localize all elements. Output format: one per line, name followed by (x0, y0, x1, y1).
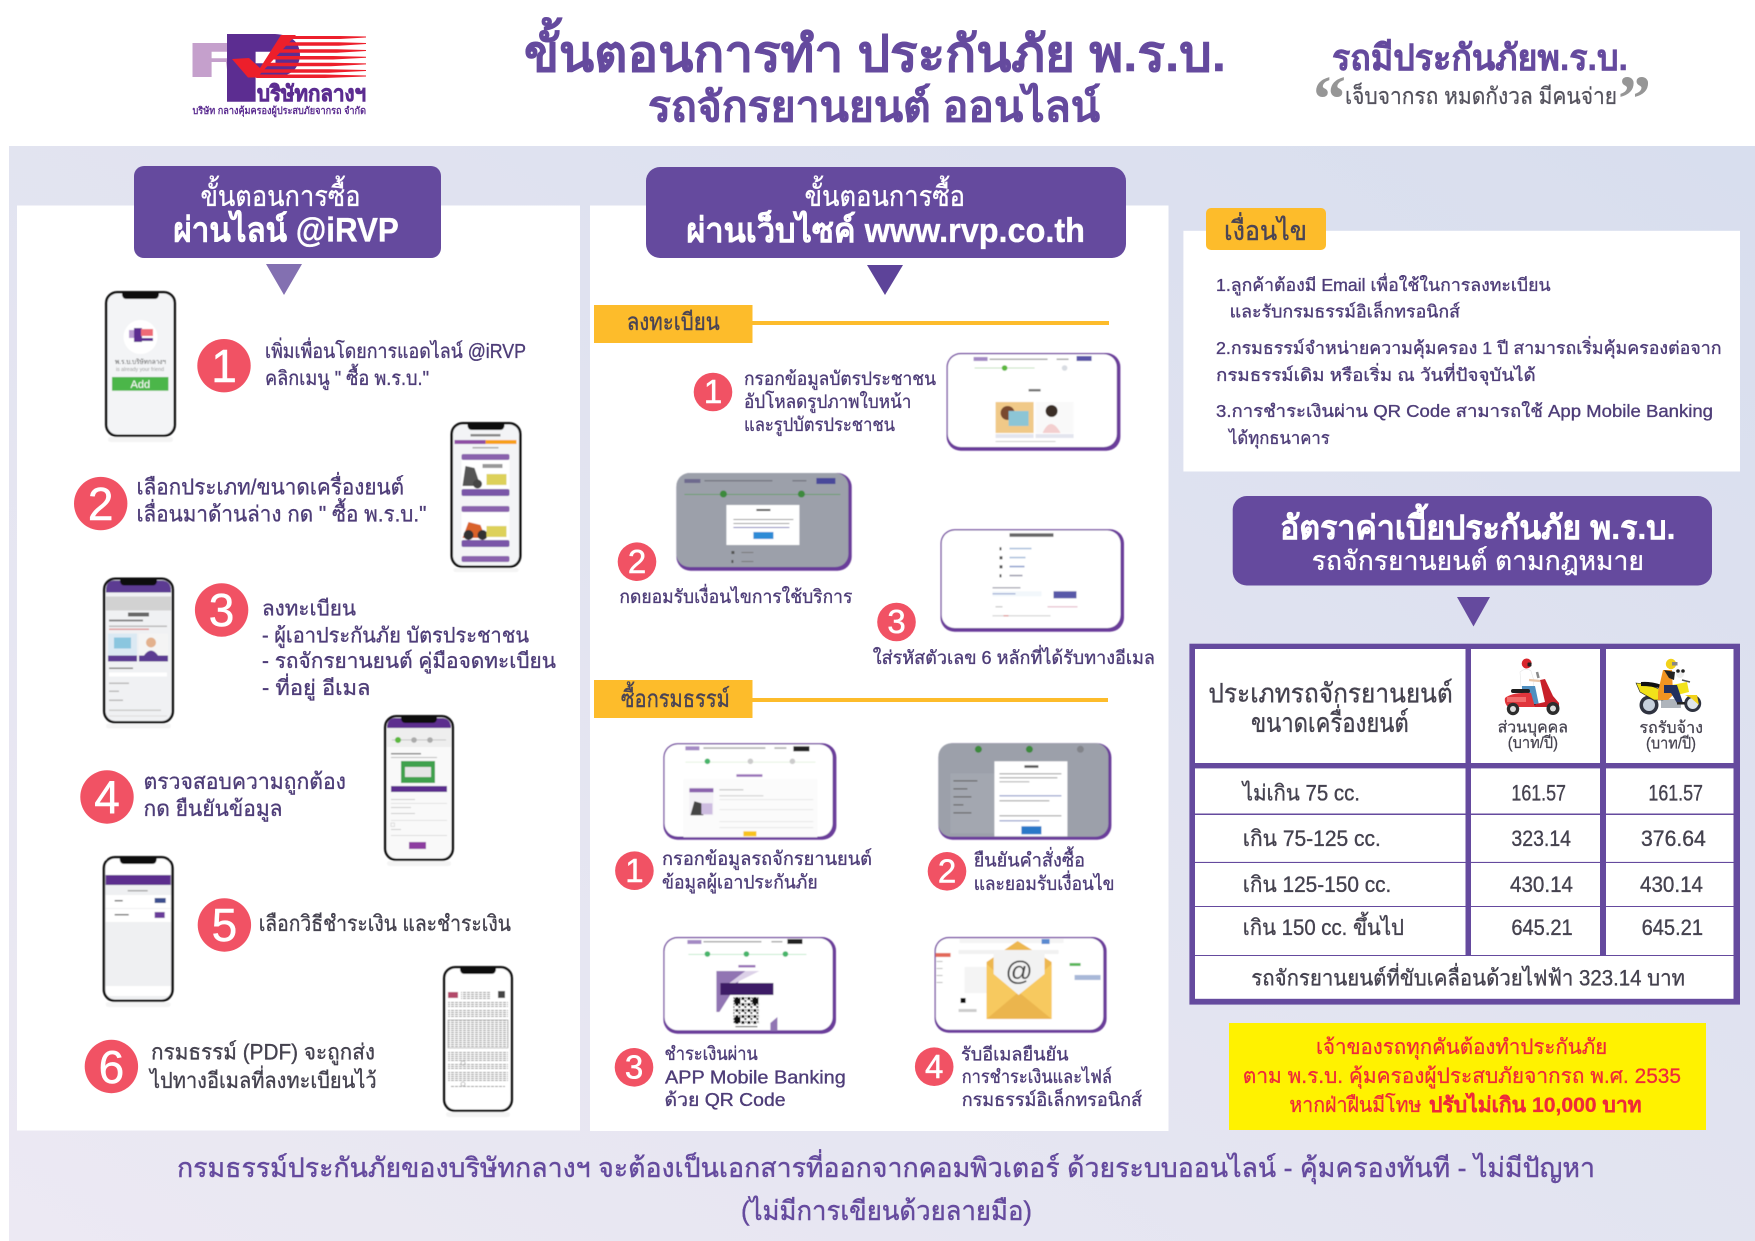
register step 2 badge: 2 (628, 543, 646, 580)
row: 75-125 cc: 323.14 (1511, 826, 1571, 851)
footer note: (ไม่มีการเขียนด้วยลายมือ) (741, 1196, 1032, 1226)
buy step 3 badge: 3 (625, 1048, 643, 1086)
step 4 text: ตรวจสอบความถูกต้อง (144, 769, 346, 795)
heading: via website: ขั้นตอนการซื้อ (805, 175, 965, 213)
table column heading: type (1208, 678, 1453, 738)
step 2 text: เลื่อนมาด้านล่าง กด " ซื้อ พ.ร.บ." (136, 498, 426, 526)
step 4 badge (80, 770, 134, 824)
row: over 150 cc (1243, 912, 1703, 940)
arrow: via website (867, 265, 903, 295)
row: up to 75 cc (1241, 780, 1703, 805)
step 2 text: เลือกประเภท/ขนาดเครื่องยนต์ (136, 472, 404, 500)
logo: RVP (192, 34, 366, 118)
title: รถจักรยานยนต์ ออนไลน์ (648, 82, 1100, 130)
phone 1: add LINE friend: Add (131, 379, 150, 391)
step 3 text: - ที่อยู่ อีเมล (262, 673, 370, 701)
row: 75-125 cc: 376.64 (1641, 826, 1706, 851)
step 5 badge: 5 (212, 899, 237, 951)
buy step 3 badge (615, 1048, 653, 1087)
step 1 badge: 1 (211, 340, 237, 392)
step 6 text (148, 1040, 377, 1093)
tagline: ” (1618, 63, 1651, 136)
register step 3 text: ใส่รหัสตัวเลข 6 หลักที่ได้รับทางอีเมล (873, 645, 1155, 668)
screenshot: email confirmation (935, 937, 1107, 1033)
table column heading: type: ประเภทรถจักรยานยนต์ (1208, 678, 1453, 709)
title (524, 17, 1226, 130)
conditions heading tab (1206, 208, 1326, 250)
footer note (177, 1149, 1595, 1226)
footer note: กรมธรรม์ประกันภัยของบริษัทกลางฯ จะต้องเป็นเอกสารที่ออกจากคอมพิวเตอร์ ด้วยระบบออนไลน์ - คุ้มครองทันที - ไม่มีปัญหา (177, 1149, 1595, 1185)
step 2 badge (74, 477, 127, 530)
buy step 4 badge (915, 1047, 954, 1086)
buy step 4 text: รับอีเมลยืนยัน (961, 1044, 1069, 1065)
screenshot: OTP verify (940, 529, 1124, 632)
buy step 2 text: และยอมรับเงื่อนไข (974, 870, 1114, 895)
conditions list: 1.ลูกค้าต้องมี Email เพื่อใช้ในการลงทะเบียน (1216, 273, 1551, 296)
row: over 150 cc: 645.21 (1642, 915, 1703, 940)
title: ขั้นตอนการทำ ประกันภัย พ.ร.บ. (524, 17, 1226, 82)
heading: premium rates (1233, 496, 1712, 586)
label: personal use: (บาท/ปี) (1508, 734, 1558, 752)
conditions list (1216, 273, 1722, 449)
row: 75-125 cc (1243, 826, 1706, 851)
label: personal use (1498, 720, 1568, 752)
step 4 badge: 4 (94, 771, 120, 823)
step 4 text (144, 769, 346, 822)
label: for hire: รถรับจ้าง (1639, 719, 1703, 737)
buy step 4 text (961, 1044, 1142, 1110)
conditions list: และรับกรมธรรม์อิเล็กทรอนิกส์ (1230, 301, 1460, 322)
panel: buy via website (590, 206, 1168, 1131)
heading: via website (646, 167, 1126, 258)
buy step 1 text: กรอกข้อมูลรถจักรยานยนต์ (662, 848, 872, 870)
label: for hire: (บาท/ปี) (1646, 734, 1696, 752)
callout: legal warning: หากฝ่าฝืนมีโทษ (1289, 1093, 1421, 1117)
register step 1 badge: 1 (704, 373, 722, 410)
phone 1: add LINE friend: is already your friend (116, 367, 164, 373)
buy step 1 badge: 1 (625, 852, 644, 889)
screenshot: email confirmation: @ (1005, 956, 1033, 986)
buy step 2 text (974, 847, 1114, 895)
row: 75-125 cc: เกิน 75-125 cc. (1243, 826, 1381, 851)
row: up to 75 cc: 161.57 (1511, 780, 1566, 805)
section tab: register: ลงทะเบียน (627, 309, 720, 336)
buy step 1 text: ข้อมูลผู้เอาประกันภัย (662, 872, 818, 893)
screenshot: confirm order (938, 743, 1111, 840)
icon: motorcycle taxi rider (1636, 659, 1701, 714)
row: over 150 cc: เกิน 150 cc. ขึ้นไป (1243, 912, 1404, 940)
row: 125-150 cc: เกิน 125-150 cc. (1243, 872, 1391, 897)
arrow: premium rates (1457, 597, 1490, 626)
row: up to 75 cc: ไม่เกิน 75 cc. (1241, 780, 1360, 805)
buy step 1 badge (615, 851, 654, 890)
phone 6: PDF policy (444, 967, 512, 1117)
tagline (1313, 37, 1651, 136)
register step 1 text: และรูปบัตรประชาชน (744, 415, 895, 436)
buy step 2 badge (928, 852, 966, 891)
register step 1 text (744, 369, 936, 436)
step 3 badge (195, 583, 248, 637)
row: 125-150 cc (1243, 872, 1703, 897)
heading: via LINE (134, 166, 441, 258)
step 2 text (136, 472, 426, 526)
icon: scooter rider (1505, 658, 1560, 715)
conditions list: 3.การชำระเงินผ่าน QR Code สามารถใช้ App Mobile Banking (1216, 401, 1713, 421)
logo: RVP: บริษัท กลางคุ้มครองผู้ประสบภัยจากรถ จำกัด (192, 105, 366, 118)
buy step 4 badge: 4 (925, 1048, 943, 1085)
callout: legal warning: ปรับไม่เกิน 10,000 บาท (1429, 1092, 1642, 1117)
step 3 text: - ผู้เอาประกันภัย บัตรประชาชน (262, 624, 529, 648)
heading: premium rates: อัตราค่าเบี้ยประกันภัย พ.ร.บ. (1280, 503, 1676, 546)
row: up to 75 cc: 161.57 (1648, 780, 1703, 805)
conditions list: 2.กรมธรรม์จำหน่ายความคุ้มครอง 1 ปี สามารถเริ่มคุ้มครองต่อจาก (1216, 336, 1722, 359)
screenshot: accept terms (676, 473, 852, 571)
register step 2 text: กดยอมรับเงื่อนไขการใช้บริการ (619, 584, 852, 607)
conditions heading tab: เงื่อนไข (1224, 212, 1307, 246)
callout: legal warning: เจ้าของรถทุกคันต้องทำประกันภัย (1316, 1036, 1607, 1060)
buy step 3 text (664, 1043, 846, 1110)
section tab: register (594, 305, 1109, 343)
step 3 text: - รถจักรยานยนต์ คู่มือจดทะเบียน (262, 649, 556, 674)
conditions list: กรมธรรม์เดิม หรือเริ่ม ณ วันที่ปัจจุบันได้ (1216, 363, 1536, 386)
step 3 text (262, 598, 556, 701)
register step 1 badge (694, 373, 732, 411)
step 3 text: ลงทะเบียน (262, 598, 356, 620)
table column heading: type: ขนาดเครื่องยนต์ (1251, 704, 1409, 738)
step 5 text: เลือกวิธีชำระเงิน และชำระเงิน (259, 911, 511, 936)
panel: conditions (1183, 208, 1740, 472)
row: 125-150 cc: 430.14 (1510, 872, 1573, 897)
buy step 3 text: APP Mobile Banking (665, 1066, 846, 1087)
label: personal use: ส่วนบุคคล (1498, 720, 1568, 738)
phone 1: add LINE friend: พ.ร.บ.บริษัทกลางฯ (115, 358, 166, 366)
tagline: “ (1313, 63, 1346, 136)
label: for hire (1639, 719, 1703, 752)
step 3 badge: 3 (209, 584, 234, 636)
row: 125-150 cc: 430.14 (1640, 872, 1703, 897)
step 1 text: เพิ่มเพื่อนโดยการแอดไลน์ @iRVP (265, 337, 526, 363)
step 1 badge (197, 339, 251, 392)
heading: via LINE: ผ่านไลน์ @iRVP (173, 210, 399, 250)
register step 1 text: กรอกข้อมูลบัตรประชาชน (744, 369, 936, 390)
buy step 2 text: ยืนยันคำสั่งซื้อ (974, 847, 1085, 872)
panel: buy via LINE (17, 206, 580, 1130)
tagline: เจ็บจากรถ หมดกังวล มีคนจ่าย (1345, 81, 1617, 109)
screenshot: upload photos (947, 353, 1120, 451)
step 5 badge (198, 898, 251, 952)
callout: legal warning: ตาม พ.ร.บ. คุ้มครองผู้ประสบภัยจากรถ พ.ศ. 2535 (1243, 1065, 1681, 1089)
logo: RVP: บริษัทกลางฯ (257, 81, 366, 106)
row: over 150 cc: 645.21 (1511, 915, 1573, 940)
phone 1: add LINE friend (106, 292, 175, 442)
buy step 1 text (662, 848, 872, 893)
buy step 4 text: การชำระเงินและไฟล์ (962, 1066, 1112, 1087)
screenshot: vehicle form (663, 743, 836, 840)
step 1 text: คลิกเมนู " ซื้อ พ.ร.บ." (265, 364, 429, 391)
phone 4: verify data (385, 716, 453, 866)
premium table (1189, 644, 1740, 1005)
register step 3 badge: 3 (887, 603, 906, 640)
register step 2 badge (618, 542, 656, 581)
heading: via website: ผ่านเว็บไซค์ www.rvp.co.th (686, 209, 1085, 250)
phone 3: register (104, 578, 173, 728)
heading: premium rates: รถจักรยานยนต์ ตามกฎหมาย (1312, 545, 1644, 576)
section tab: buy policy (594, 680, 1108, 718)
step 6 badge (85, 1040, 138, 1093)
step 6 text: กรมธรรม์ (PDF) จะถูกส่ง (151, 1040, 375, 1066)
section tab: buy policy: ซื้อกรมธรรม์ (621, 681, 730, 713)
step 2 badge: 2 (88, 478, 113, 530)
buy step 2 badge: 2 (938, 852, 956, 890)
buy step 3 text: ชำระเงินผ่าน (664, 1043, 758, 1064)
phone 5: choose payment (104, 857, 172, 1007)
step 6 badge: 6 (99, 1041, 124, 1093)
arrow: via LINE (266, 264, 302, 295)
tagline: รถมีประกันภัยพ.ร.บ. (1332, 37, 1628, 78)
step 4 text: กด ยืนยันข้อมูล (144, 796, 282, 822)
step 6 text: ไปทางอีเมลที่ลงทะเบียนไว้ (148, 1065, 377, 1093)
buy step 4 text: กรมธรรม์อิเล็กทรอนิกส์ (962, 1087, 1142, 1110)
conditions list: ได้ทุกธนาคาร (1227, 428, 1330, 449)
step 1 text (265, 337, 526, 391)
buy step 3 text: ด้วย QR Code (664, 1089, 786, 1110)
screenshot: QR payment (663, 937, 836, 1034)
phone 2: choose engine size (452, 423, 520, 572)
row: electric motorcycle: รถจักรยานยนต์ที่ขับเคลื่อนด้วยไฟฟ้า 323.14 บาท (1251, 963, 1685, 991)
heading: via LINE: ขั้นตอนการซื้อ (200, 175, 360, 213)
callout: legal warning (1229, 1023, 1706, 1130)
register step 3 badge (877, 603, 916, 641)
register step 1 text: อัปโหลดรูปภาพใบหน้า (744, 390, 911, 413)
